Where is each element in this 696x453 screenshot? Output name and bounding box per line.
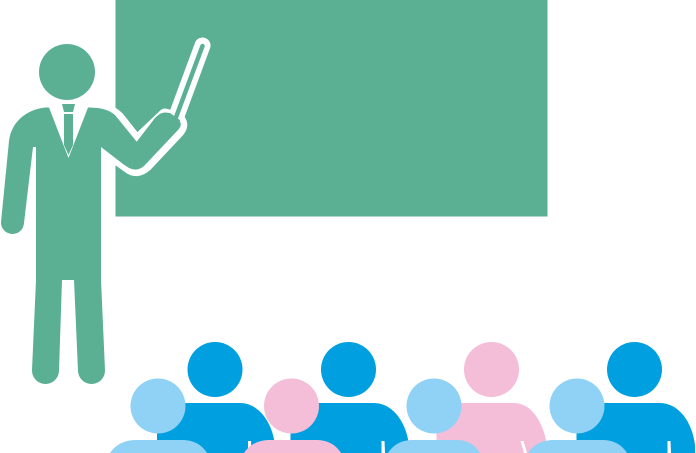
student: front row 1 — [110, 378, 207, 453]
student: front row 4 — [528, 378, 627, 453]
student: front row 3 — [388, 378, 480, 453]
teacher body — [1, 108, 181, 384]
student: front row 2 — [244, 378, 341, 453]
student: back row 2 — [290, 342, 409, 453]
student: back row 4 — [576, 342, 695, 453]
teacher head — [39, 44, 95, 100]
panel: blackboard — [116, 0, 548, 216]
icon: teacher — [1, 44, 203, 384]
student: back row 3 — [436, 342, 547, 453]
pointer outline — [175, 46, 202, 120]
pointer stick — [175, 46, 202, 120]
shirt collar — [49, 108, 88, 158]
student: back row 1 — [157, 342, 275, 453]
arm top joint — [137, 114, 180, 150]
teacher arm outline — [88, 108, 181, 170]
tie — [62, 104, 75, 155]
